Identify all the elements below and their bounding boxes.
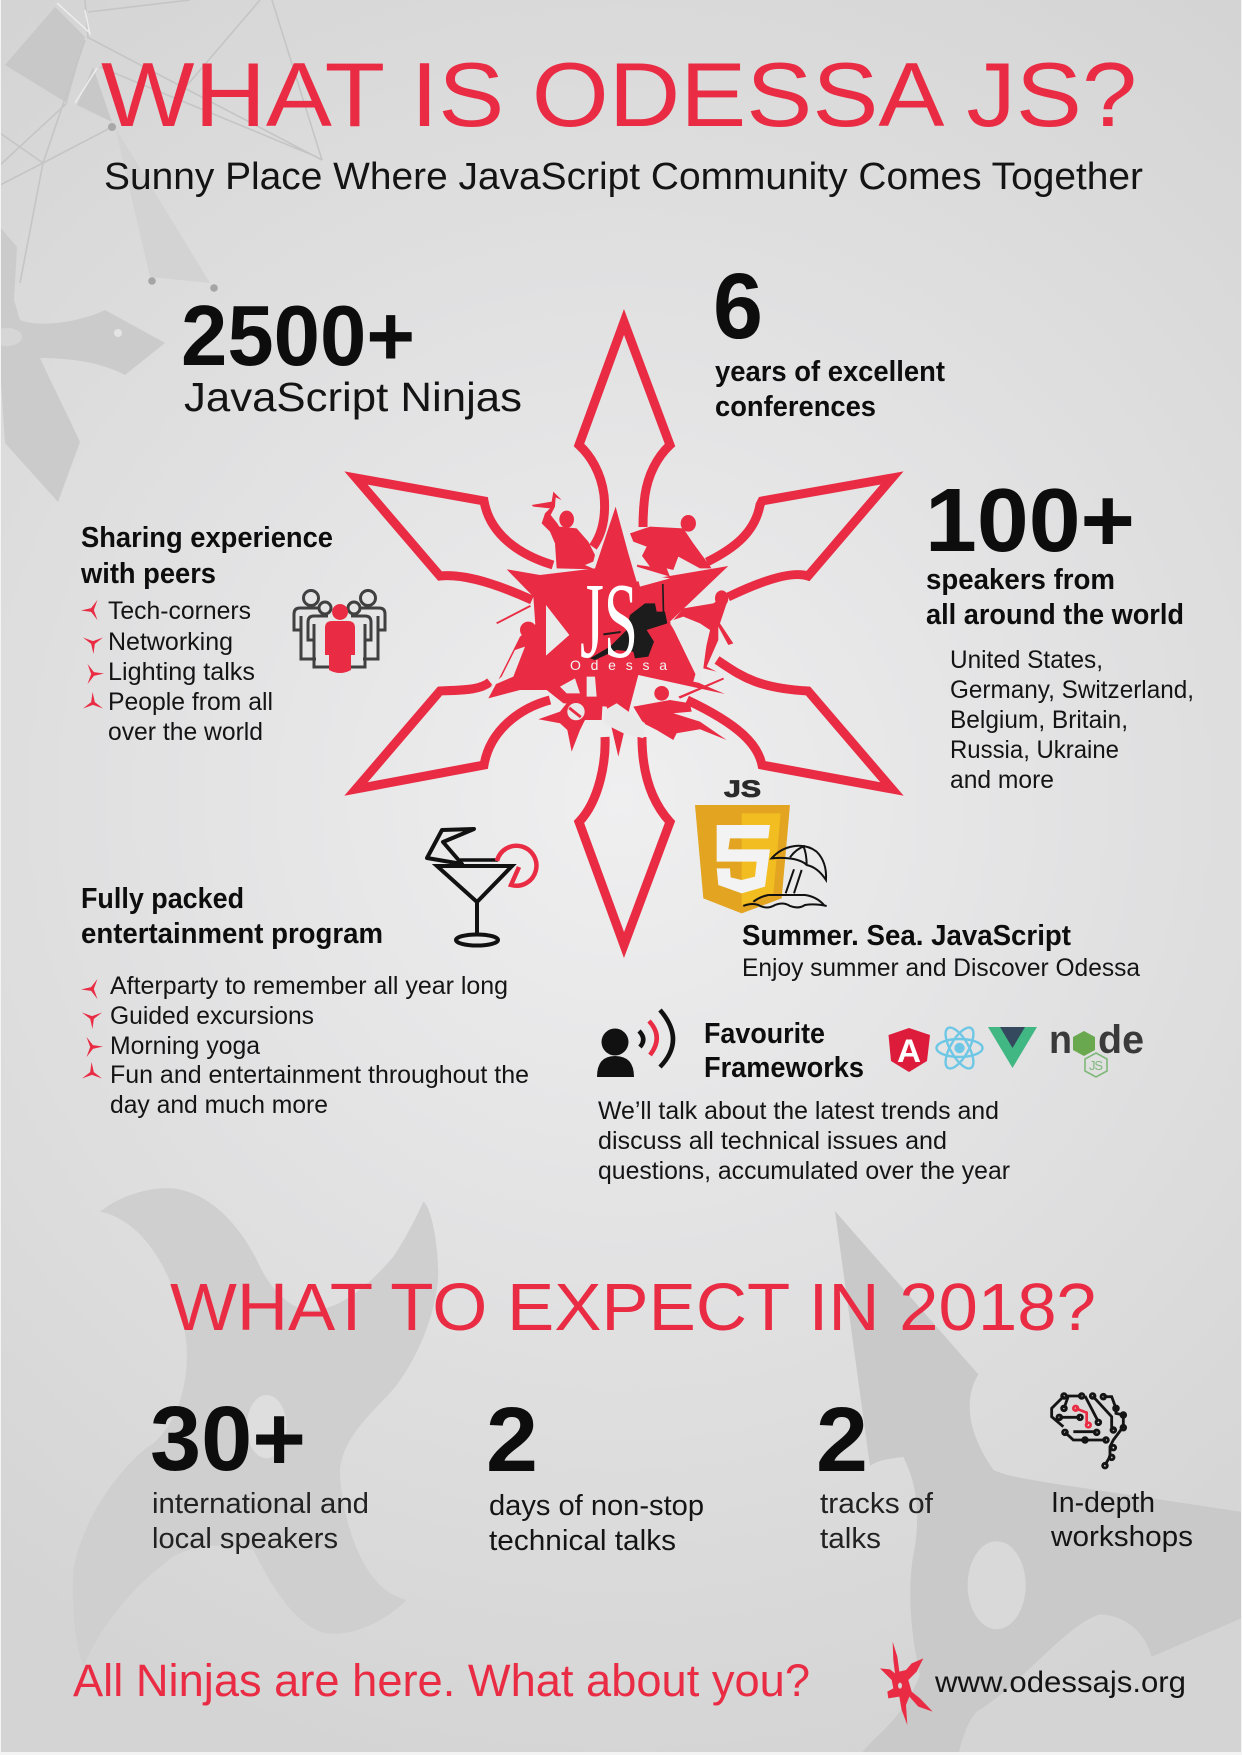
- heading: sharing: [80, 522, 333, 590]
- stat: 2 days: [486, 1389, 704, 1557]
- icon: js5 beach: [695, 776, 827, 913]
- countries text: Germany, Switzerland,: [950, 676, 1194, 704]
- text: summer sea javascript: [742, 920, 1140, 982]
- stat: 100+ speakers: 100+: [925, 471, 1135, 571]
- icon: people group: [294, 590, 385, 673]
- stat: 2500+ JavaScript Ninjas: 2500+: [181, 289, 415, 384]
- icon: speaker person: [597, 1010, 673, 1077]
- logo: react: [936, 1024, 982, 1072]
- heading: sharing: Sharing experience: [81, 522, 333, 554]
- stat: 30+ speakers: 30+: [150, 1388, 306, 1490]
- stat: 2 days: technical talks: [489, 1525, 676, 1557]
- icon: cocktail: [427, 829, 536, 946]
- countries text: [950, 646, 1194, 794]
- text: latest trends: We’ll talk about the latest trends and: [598, 1097, 999, 1125]
- stat: 6 years: conferences: [715, 391, 876, 423]
- countries text: Belgium, Britain,: [950, 706, 1128, 734]
- logo: angular: [888, 1028, 930, 1072]
- ninja silhouettes: [488, 492, 733, 752]
- logo: node: de: [1098, 1018, 1144, 1062]
- framework logos: [888, 1018, 1144, 1077]
- list: entertainment: Fun and entertainment throughout the: [110, 1061, 529, 1089]
- heading: what to expect: WHAT TO EXPECT IN 2018?: [170, 1270, 1096, 1345]
- subtitle: Sunny Place Where JavaScript Community Comes Together: [104, 156, 1143, 198]
- shuriken outline: [356, 322, 892, 945]
- stat: 2 days: days of non-stop: [489, 1490, 704, 1522]
- text: latest trends: [598, 1097, 1010, 1185]
- list: entertainment: Morning yoga: [110, 1032, 260, 1060]
- heading: sharing: with peers: [80, 558, 216, 590]
- text: summer sea javascript: Summer. Sea. JavaScript: [742, 920, 1071, 952]
- list: sharing: Lighting talks: [108, 658, 255, 686]
- stat: 2 tracks: 2: [816, 1389, 868, 1491]
- list: sharing: [81, 597, 273, 746]
- text: summer sea javascript: Enjoy summer and Discover Odessa: [742, 954, 1140, 982]
- list: entertainment: [81, 972, 529, 1119]
- icon: circuit brain: [1052, 1394, 1126, 1468]
- text: in-depth workshops: In-depth: [1051, 1487, 1155, 1519]
- countries text: United States,: [950, 646, 1103, 674]
- stat: 30+ speakers: international and: [152, 1488, 369, 1520]
- website url: www.odessajs.org: [934, 1666, 1186, 1699]
- stat: 100+ speakers: speakers from: [926, 564, 1115, 596]
- heading: favourite frameworks: Favourite: [704, 1018, 825, 1050]
- panel: entertainment: [81, 883, 529, 1119]
- text: latest trends: discuss all technical issues and: [598, 1127, 947, 1155]
- logo: node: JS: [1089, 1058, 1103, 1073]
- central JS Odessa logo: JS: [580, 562, 638, 681]
- text: in-depth workshops: [1050, 1487, 1193, 1553]
- stat: 2500+ JavaScript Ninjas: [181, 289, 522, 420]
- heading: entertainment: entertainment program: [81, 918, 383, 950]
- stat: 30+ speakers: [150, 1388, 369, 1555]
- countries text: and more: [950, 766, 1054, 794]
- list: entertainment: Afterparty to remember all year long: [110, 972, 508, 1000]
- stat: 6 years: years of excellent: [715, 356, 945, 388]
- red star: [507, 507, 728, 757]
- stat: 2 days: 2: [486, 1389, 538, 1491]
- stat: 100+ speakers: all around the world: [926, 599, 1184, 631]
- icon: shuriken logo small: [880, 1642, 933, 1725]
- panel: sharing experience: [80, 522, 333, 746]
- list: sharing: Networking: [108, 628, 233, 656]
- stat: 2 tracks: tracks of: [820, 1488, 934, 1520]
- text: in-depth workshops: workshops: [1050, 1521, 1193, 1553]
- heading: favourite frameworks: [704, 1018, 864, 1084]
- logo: node: [1049, 1018, 1144, 1077]
- black ninja: [590, 584, 667, 660]
- list: sharing: over the world: [108, 718, 263, 746]
- logo: angular: A: [897, 1033, 921, 1069]
- list: entertainment: day and much more: [110, 1091, 328, 1119]
- stat: 2 tracks: talks: [820, 1523, 881, 1555]
- text: latest trends: questions, accumulated over the year: [598, 1157, 1010, 1185]
- heading: favourite frameworks: Frameworks: [704, 1052, 864, 1084]
- central JS Odessa logo: [488, 492, 733, 757]
- stat: 2500+ JavaScript Ninjas: JavaScript Ninjas: [184, 374, 522, 420]
- title: WHAT IS ODESSA JS?: [101, 45, 1137, 146]
- central JS Odessa logo: Odessa: [570, 657, 667, 673]
- stat: 6 years: [713, 254, 945, 423]
- stat: 2 tracks: [816, 1389, 934, 1555]
- call to action: All Ninjas are here. What about you?: [73, 1655, 810, 1706]
- stat: 100+ speakers: [925, 471, 1184, 631]
- list: sharing: Tech-corners: [108, 597, 251, 625]
- heading: entertainment: Fully packed: [81, 883, 244, 915]
- logo: vue: [988, 1027, 1037, 1068]
- icon: js5 beach: JS: [724, 776, 761, 803]
- stat: 30+ speakers: local speakers: [152, 1523, 338, 1555]
- logo: node: n: [1049, 1018, 1072, 1062]
- list: entertainment: Guided excursions: [110, 1002, 314, 1030]
- heading: entertainment: [81, 883, 383, 950]
- list: sharing: People from all: [108, 688, 273, 716]
- countries text: Russia, Ukraine: [950, 736, 1119, 764]
- stat: 6 years: 6: [713, 254, 763, 358]
